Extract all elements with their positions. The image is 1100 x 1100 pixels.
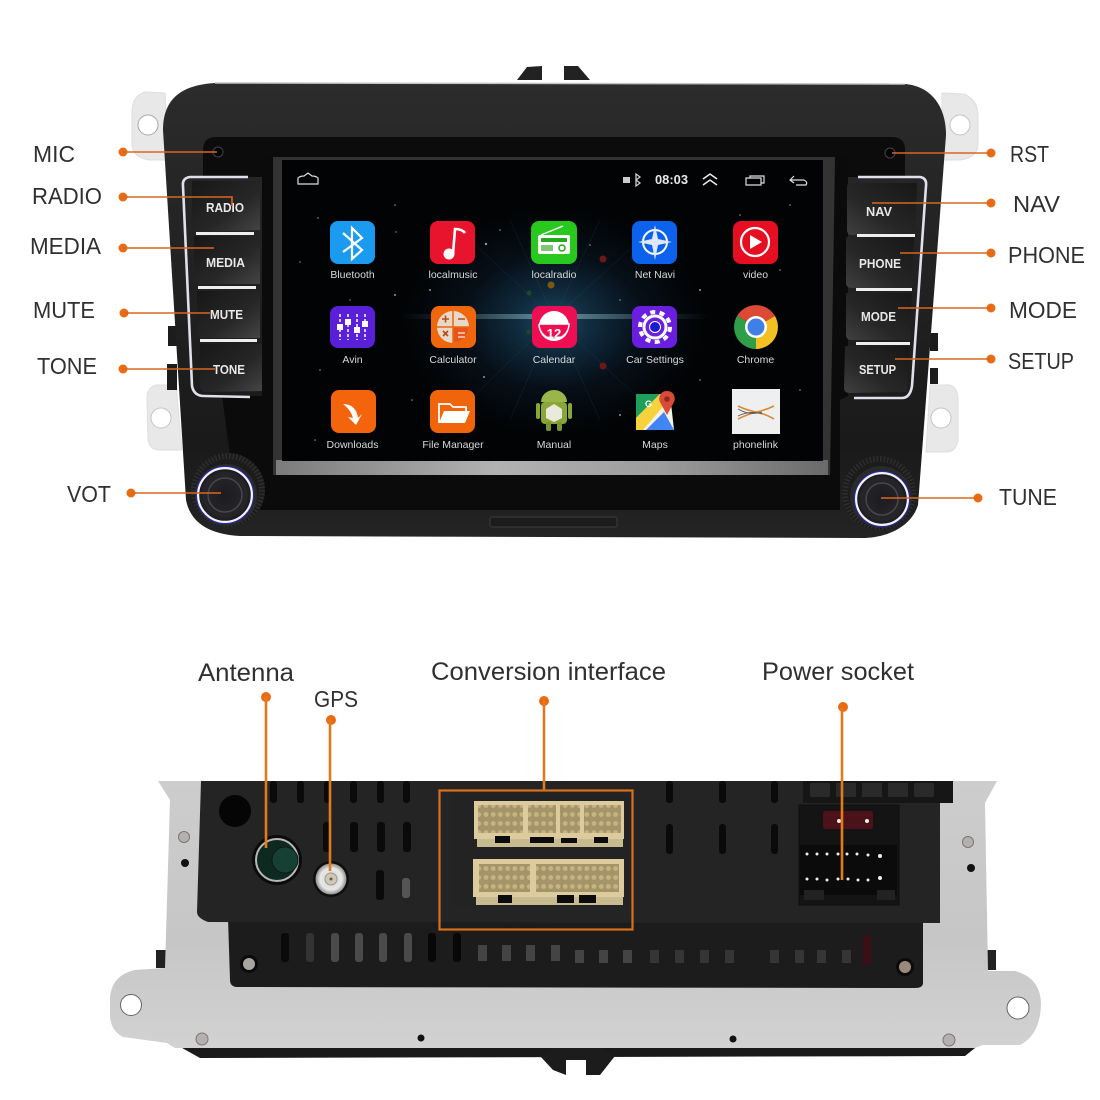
callout: TUNE: TUNE	[999, 484, 1057, 510]
plate holes	[120, 859, 1029, 1042]
left button: MEDIA	[194, 236, 260, 289]
antenna port	[252, 835, 302, 885]
callout: Conversion interface: Conversion interface	[431, 658, 666, 686]
callout: Power socket: Power socket	[762, 658, 914, 686]
lower black block	[228, 918, 923, 988]
app: Avin: Avin	[342, 354, 363, 366]
side latches	[167, 326, 938, 390]
app: localradio: localradio	[532, 269, 577, 281]
power socket	[799, 805, 899, 905]
callouts: front right	[872, 141, 1085, 510]
right button: MODE: MODE	[861, 309, 896, 324]
callout: GPS	[314, 686, 358, 871]
device body	[163, 83, 946, 538]
callout: MUTE: MUTE	[33, 297, 95, 323]
callout: MEDIA	[30, 233, 214, 259]
app: Downloads: Downloads	[327, 439, 378, 451]
left button: TONE: TONE	[213, 362, 245, 377]
app: Car Settings: Car Settings	[626, 354, 684, 366]
status bar	[298, 173, 807, 187]
app: Chrome: Chrome	[737, 354, 774, 366]
callout: RADIO	[32, 183, 232, 209]
app: Bluetooth	[330, 221, 375, 281]
reset hole	[885, 148, 895, 158]
callout: TUNE	[881, 484, 1057, 510]
mounting tabs	[132, 92, 978, 452]
app: Calculator: Calculator	[429, 354, 477, 366]
right button: MODE	[846, 293, 912, 345]
app: Calendar: 12	[547, 326, 561, 341]
callout: SETUP	[895, 348, 1074, 374]
icon: recent apps	[746, 176, 764, 185]
app: Manual	[536, 390, 572, 451]
plate screws	[178, 832, 974, 1046]
callout: NAV	[872, 191, 1061, 217]
rear unit	[110, 781, 1041, 1075]
app: Bluetooth: Bluetooth	[330, 269, 375, 281]
bottom clip	[540, 1040, 615, 1075]
icon: chevrons	[703, 174, 717, 185]
screen	[282, 160, 823, 461]
right knob	[842, 456, 916, 530]
right button: PHONE: PHONE	[859, 256, 901, 271]
callout: GPS: GPS	[314, 686, 358, 712]
app: phonelink	[732, 389, 780, 451]
callout: PHONE	[900, 242, 1085, 268]
callouts: front left	[30, 141, 232, 507]
callout: RADIO: RADIO	[32, 183, 102, 209]
left knob	[191, 453, 265, 527]
nebula streak	[400, 314, 710, 319]
callout: MODE	[898, 297, 1077, 323]
callout: NAV: NAV	[1013, 191, 1061, 217]
callout: Conversion interface	[431, 658, 666, 930]
right button: SETUP: SETUP	[859, 362, 896, 377]
app: Maps: Maps	[642, 439, 668, 451]
connector: top row	[474, 801, 624, 847]
app: Downloads	[327, 390, 378, 451]
left button: MUTE	[197, 291, 260, 342]
app: Net Navi	[632, 221, 677, 281]
app: localmusic	[428, 221, 478, 281]
silver lower strip	[276, 460, 828, 475]
app: Car Settings	[626, 306, 684, 366]
right button rail	[854, 177, 926, 398]
top terminals	[803, 781, 953, 803]
left button rail	[183, 177, 250, 397]
left button: MEDIA: MEDIA	[206, 255, 246, 270]
vents: upper left	[270, 781, 411, 900]
connector: bottom row	[473, 859, 624, 905]
app: localmusic: localmusic	[428, 269, 478, 281]
status icons	[623, 174, 640, 186]
app: File Manager: File Manager	[422, 439, 484, 451]
bottom black strip	[175, 1044, 980, 1058]
left button: RADIO: RADIO	[206, 200, 244, 215]
callout: RST: RST	[1010, 141, 1049, 167]
conversion interface panel	[452, 795, 633, 907]
block screws	[240, 955, 914, 976]
left button: MUTE: MUTE	[210, 307, 243, 322]
app: video	[733, 221, 778, 281]
app: Maps	[636, 391, 675, 451]
icon: back	[790, 176, 807, 185]
app: localradio	[531, 221, 577, 281]
app: Chrome	[734, 305, 778, 366]
mic hole	[213, 147, 223, 157]
upper black block	[197, 781, 953, 923]
metal plate	[110, 781, 1041, 1048]
callout: MUTE	[33, 297, 210, 323]
app: Calculator	[429, 306, 477, 366]
top clips	[517, 66, 590, 80]
app: Calendar	[532, 306, 577, 366]
callout: MIC	[33, 141, 217, 167]
left button: TONE	[200, 344, 262, 392]
right button: PHONE	[846, 237, 914, 291]
icon: home	[298, 173, 318, 184]
callout: Antenna: Antenna	[198, 659, 294, 687]
front unit	[132, 66, 978, 538]
app: Maps: G	[645, 399, 652, 409]
app: Calendar: Calendar	[533, 354, 576, 366]
right button: NAV: NAV	[866, 204, 892, 219]
app: Net Navi: Net Navi	[635, 269, 675, 281]
side latches	[156, 950, 996, 970]
bottom slot	[490, 517, 617, 527]
callout: TONE	[37, 353, 215, 379]
callout: MEDIA: MEDIA	[30, 233, 102, 259]
vents: centre	[666, 781, 778, 854]
app: Avin	[330, 306, 375, 366]
left button: RADIO	[192, 181, 260, 235]
callout: Power socket	[762, 658, 914, 880]
callout: SETUP: SETUP	[1008, 348, 1074, 374]
app: video: video	[743, 269, 768, 281]
vents: lower	[281, 933, 871, 965]
callout: MODE: MODE	[1009, 297, 1077, 323]
callout: MIC: MIC	[33, 141, 75, 167]
callout: RST	[892, 141, 1049, 167]
black round port	[219, 795, 251, 827]
clock: 08:03	[655, 173, 688, 187]
callout: VOT: VOT	[67, 481, 111, 507]
callout: VOT	[67, 481, 221, 507]
app: Manual: Manual	[537, 439, 571, 451]
callout: PHONE: PHONE	[1008, 242, 1085, 268]
app: phonelink: phonelink	[733, 439, 779, 451]
right button: SETUP	[844, 346, 910, 393]
screen frame	[273, 157, 835, 475]
callout: TONE: TONE	[37, 353, 97, 379]
callout: Antenna	[198, 659, 294, 848]
GPS port	[313, 861, 349, 897]
app: File Manager	[422, 390, 484, 451]
right button: NAV	[847, 183, 917, 237]
inner recess	[203, 137, 905, 177]
